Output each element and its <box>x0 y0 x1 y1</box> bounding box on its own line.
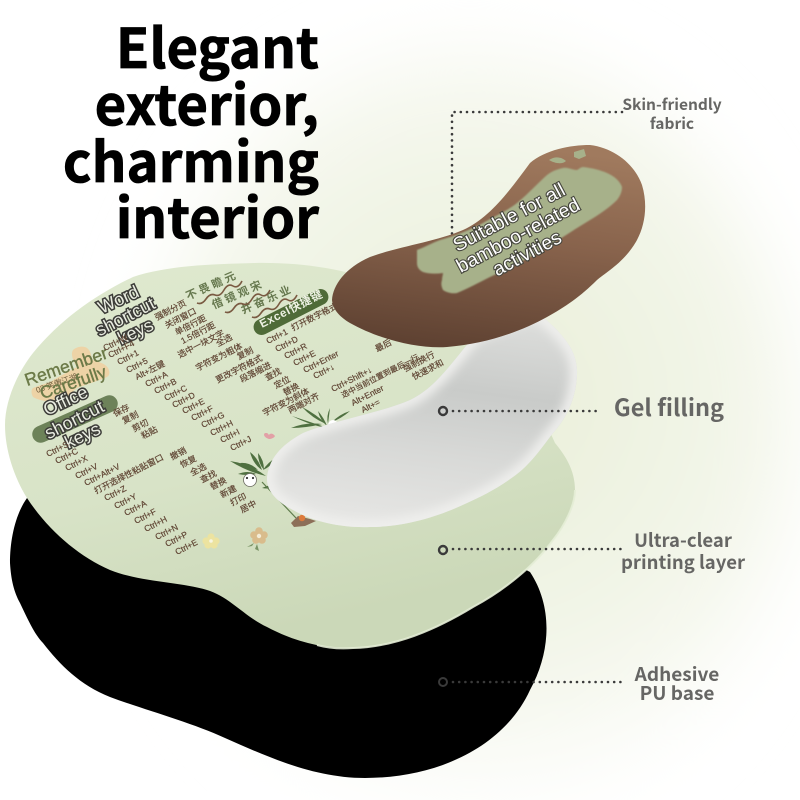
column: excel shortcuts: Ctrl+↓ <box>311 362 336 381</box>
text: Word shortcut keys: keys <box>114 315 156 348</box>
small text in blob: 03 笑傲江湖 <box>34 371 78 395</box>
column: office shortcuts <box>44 439 199 557</box>
column: excel shortcuts: 强制换行 <box>401 349 437 374</box>
column: office shortcuts: Ctrl+C <box>53 446 80 466</box>
column: office functions: 替换 <box>208 475 229 492</box>
title: exterior, <box>95 62 319 141</box>
column: excel shortcuts: 最后 <box>373 337 394 354</box>
column: office shortcuts: Ctrl+X <box>63 453 89 473</box>
column: word shortcuts: Ctrl+D <box>170 390 197 410</box>
column: word shortcuts: Ctrl+E <box>180 396 206 416</box>
column: word functions: 全选 <box>214 332 234 349</box>
label: ultra-clear printing layer: Ultra-clear <box>634 527 733 553</box>
text: decorative chinese headings <box>183 266 296 318</box>
label: adhesive PU base: PU base <box>640 679 714 706</box>
column: word functions: 字符变为斜体 <box>261 386 311 418</box>
column: word functions: 选中一块文字 <box>176 328 226 360</box>
column: word functions: 定位 <box>272 374 292 391</box>
icon: tan flower <box>247 527 268 551</box>
label: gel filling: Gel filling <box>614 389 724 423</box>
column: word shortcuts: Ctrl+J <box>228 434 253 453</box>
column: word shortcuts <box>101 332 253 453</box>
text: suitable for all bamboo-related activities: activities <box>489 226 566 281</box>
column: excel shortcuts: Ctrl+D <box>273 334 300 354</box>
pill: excel shortcut keys <box>251 286 331 338</box>
fabric green print <box>417 167 622 293</box>
column: office functions: 居中 <box>238 498 258 515</box>
layer: adhesive PU base <box>10 450 546 778</box>
leader: adhesive PU base <box>439 678 626 686</box>
column: excel shortcuts: Ctrl+Shift+↓ <box>329 365 373 394</box>
column: excel shortcuts: Ctrl+1 <box>264 326 290 346</box>
column: word functions: 段落缩进 <box>238 360 273 384</box>
column: word functions: 更改字符格式 <box>214 353 264 385</box>
text: Office shortcut keys: keys <box>61 419 103 452</box>
column: excel shortcuts: Ctrl+E <box>291 348 317 368</box>
illustration: bamboo and panda <box>230 407 350 527</box>
text: Office shortcut keys: shortcut <box>41 396 107 443</box>
column: word shortcuts: Ctrl+F4 <box>106 338 136 360</box>
column: word functions: 复制 <box>235 345 255 362</box>
column: excel shortcuts: Ctrl+Enter <box>301 348 340 375</box>
layer: gel filling <box>267 312 577 527</box>
column: word shortcuts: Ctrl+H <box>208 418 235 438</box>
column: excel shortcuts: 选中当前位置到最后一行 <box>339 352 421 400</box>
column: office functions: 打印 <box>228 491 248 508</box>
column: office functions: 全选 <box>188 461 209 478</box>
text: Office shortcut keys <box>40 382 107 452</box>
office pad label blob <box>32 347 109 401</box>
pill: excel shortcut keys: Excel快捷键 <box>257 287 325 331</box>
column: word shortcuts: Alt+左键 <box>133 358 167 382</box>
label: skin-friendly fabric: fabric <box>650 112 694 134</box>
column: office shortcuts: Ctrl+Y <box>112 491 138 511</box>
leader: gel filling <box>439 407 600 415</box>
layer: skin-friendly fabric <box>332 145 645 347</box>
column: word functions: 强制分页 <box>153 298 188 322</box>
column: word functions: 单倍行距 <box>173 313 208 337</box>
layer: printing layer pad <box>5 93 746 706</box>
text: decorative chinese headings: 不畏瞻元 <box>183 266 241 304</box>
column: office functions: 查找 <box>198 468 219 485</box>
label: ultra-clear printing layer <box>621 527 746 575</box>
text: Word shortcut keys: Word <box>95 281 142 318</box>
column: excel shortcuts: Alt+= <box>359 397 382 415</box>
column: word shortcuts: Ctrl+I <box>218 427 241 445</box>
column: word functions: 两端对齐 <box>286 391 321 415</box>
text: Word shortcut keys: shortcut <box>92 293 158 340</box>
text: Remember Carefully: Carefully <box>37 362 109 403</box>
text: decorative chinese headings: 借镜观宋 <box>209 275 267 313</box>
column: office functions: 剪切 <box>130 417 150 434</box>
label: skin-friendly fabric <box>622 93 722 134</box>
column: office functions: 撤销 <box>168 445 189 462</box>
column: word functions: 查找 <box>263 366 283 383</box>
column: word shortcuts: Ctrl+C <box>162 383 189 403</box>
column: word shortcuts: Ctrl+B <box>152 376 178 396</box>
column: word functions: 1.5倍行距 <box>179 320 217 346</box>
column: word functions: 替换 <box>281 381 301 398</box>
title: charming <box>63 119 319 198</box>
column: word shortcuts: Ctrl+1 <box>115 347 141 367</box>
column: word shortcuts: Ctrl+W <box>101 332 129 353</box>
column: word shortcuts: Ctrl+A <box>143 369 169 389</box>
text: suitable for all bamboo-related activities: Suitable for all <box>449 179 569 256</box>
icon: yellow flower <box>202 533 220 549</box>
leader: printing layer <box>439 546 622 554</box>
title: interior <box>116 175 319 254</box>
column: office shortcuts: Ctrl+V <box>73 461 99 481</box>
column: word shortcuts: Ctrl+F <box>189 403 215 423</box>
leader: skin-friendly fabric <box>452 112 622 236</box>
column: office functions <box>111 402 258 515</box>
column: office functions: 新建 <box>218 483 239 500</box>
column: word shortcuts: Ctrl+5 <box>124 355 150 375</box>
column: word shortcuts: Ctrl+G <box>199 410 226 430</box>
column: word functions: 关闭窗口 <box>163 306 198 330</box>
column: office shortcuts: 打开选择性粘贴窗口 <box>92 452 165 496</box>
column: excel shortcuts: 快速求和 <box>410 357 445 382</box>
column: office functions: 粘贴 <box>139 424 160 441</box>
column: office shortcuts: Ctrl+N <box>153 522 180 542</box>
column: excel shortcuts: 打开数字格式 <box>289 300 340 333</box>
text: Office shortcut keys: Office <box>40 382 91 419</box>
column: excel shortcuts: Ctrl+R <box>282 341 309 361</box>
column: office functions: 复制 <box>120 409 140 426</box>
label: ultra-clear printing layer: printing layer <box>621 549 746 575</box>
column: word functions <box>153 298 321 418</box>
column: excel shortcuts <box>264 300 445 415</box>
label: skin-friendly fabric: Skin-friendly <box>622 93 722 115</box>
column: office shortcuts: Ctrl+A <box>122 498 148 518</box>
icon: heart <box>264 433 275 439</box>
column: office functions: 保存 <box>111 402 132 419</box>
title: Elegant <box>116 5 319 84</box>
column: excel shortcuts: Alt+Enter <box>349 383 385 408</box>
title <box>63 5 319 254</box>
column: office shortcuts: Ctrl+F <box>132 506 158 526</box>
label: adhesive PU base: Adhesive <box>634 660 719 687</box>
column: office shortcuts: Ctrl+E <box>173 537 199 557</box>
fabric print spots <box>549 149 586 163</box>
column: word functions: 字符变为粗体 <box>194 341 244 373</box>
text: decorative chinese headings: 井奋乐业 <box>238 280 296 318</box>
column: office shortcuts: Ctrl+Alt+V <box>82 461 122 488</box>
column: office shortcuts: Ctrl+Z <box>102 483 128 503</box>
text: Remember Carefully: Remember <box>22 343 110 390</box>
column: office shortcuts: Ctrl+S <box>44 439 70 459</box>
column: office shortcuts: Ctrl+H <box>142 514 169 534</box>
text: suitable for all bamboo-related activities: bamboo-related <box>453 194 584 277</box>
pill: office shortcut keys <box>30 393 120 445</box>
label: adhesive PU base <box>634 660 719 706</box>
decorative wavy lines <box>197 281 297 318</box>
column: office shortcuts: Ctrl+P <box>163 529 189 549</box>
column: office functions: 恢复 <box>178 453 199 470</box>
